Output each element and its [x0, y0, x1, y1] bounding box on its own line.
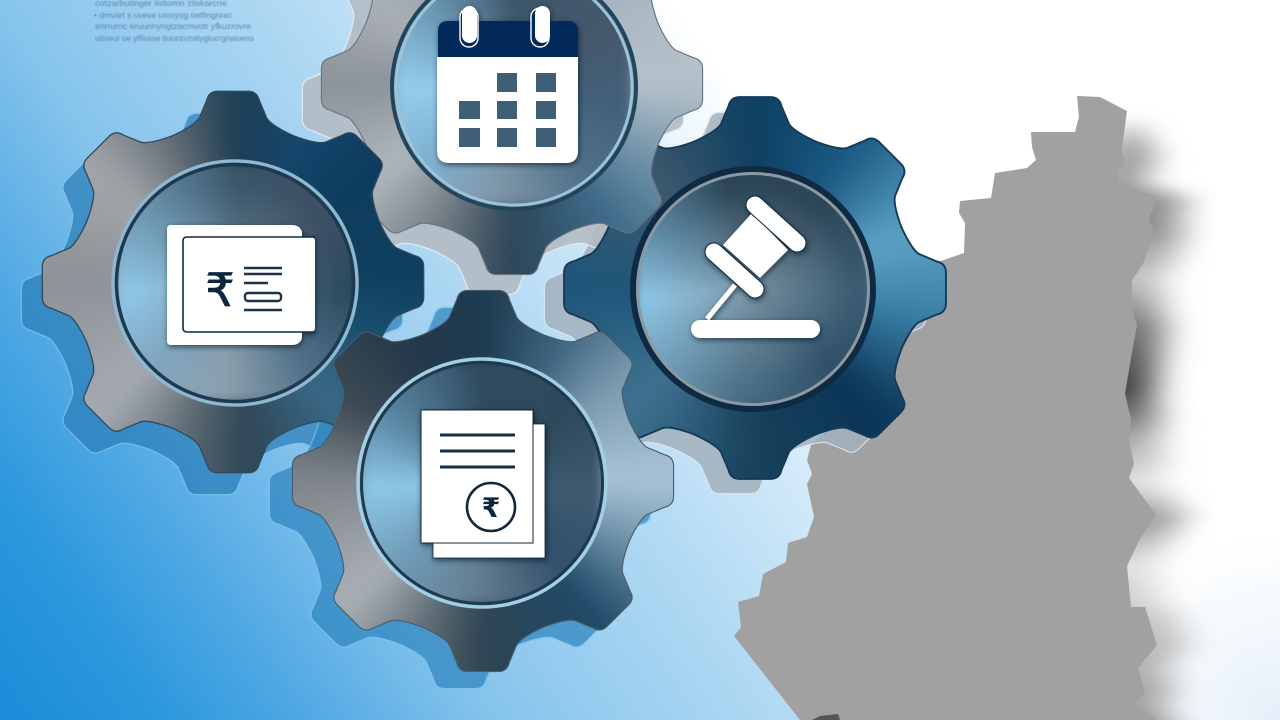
gear: right (gavel)	[563, 96, 947, 480]
gear shadow: top	[303, 0, 683, 294]
blurred top-left text block	[94, 0, 254, 43]
grey map silhouette	[734, 96, 1157, 720]
icon: calendar	[437, 6, 578, 163]
blurred top-left text block: • dmvart s uvese unroyog oetfingnrac	[94, 11, 232, 20]
icon: gavel	[700, 205, 811, 329]
blurred top-left text block: uttoeur oe ytfiuxse tiuunzunatygtucrgnaiuens	[95, 34, 254, 43]
gear: left (rupee card)	[42, 90, 424, 474]
map edge shadow	[1028, 118, 1185, 720]
gear: top (calendar)	[320, 0, 704, 276]
gear shadow: right	[545, 113, 925, 493]
dark map fragment at bottom edge	[812, 714, 840, 720]
blurred top-left text block: enrrurnc eruunnyngtzacmvotr yfkuzrovre	[95, 22, 252, 31]
icon: invoice document: ₹	[482, 493, 500, 524]
gear shadow: left	[22, 114, 402, 494]
icon: invoice document	[421, 410, 545, 558]
icon: rupee card: ₹	[205, 263, 235, 317]
gear shadow: bottom	[270, 308, 650, 688]
gear: bottom (invoice)	[292, 290, 674, 672]
icon: rupee card	[167, 225, 315, 345]
